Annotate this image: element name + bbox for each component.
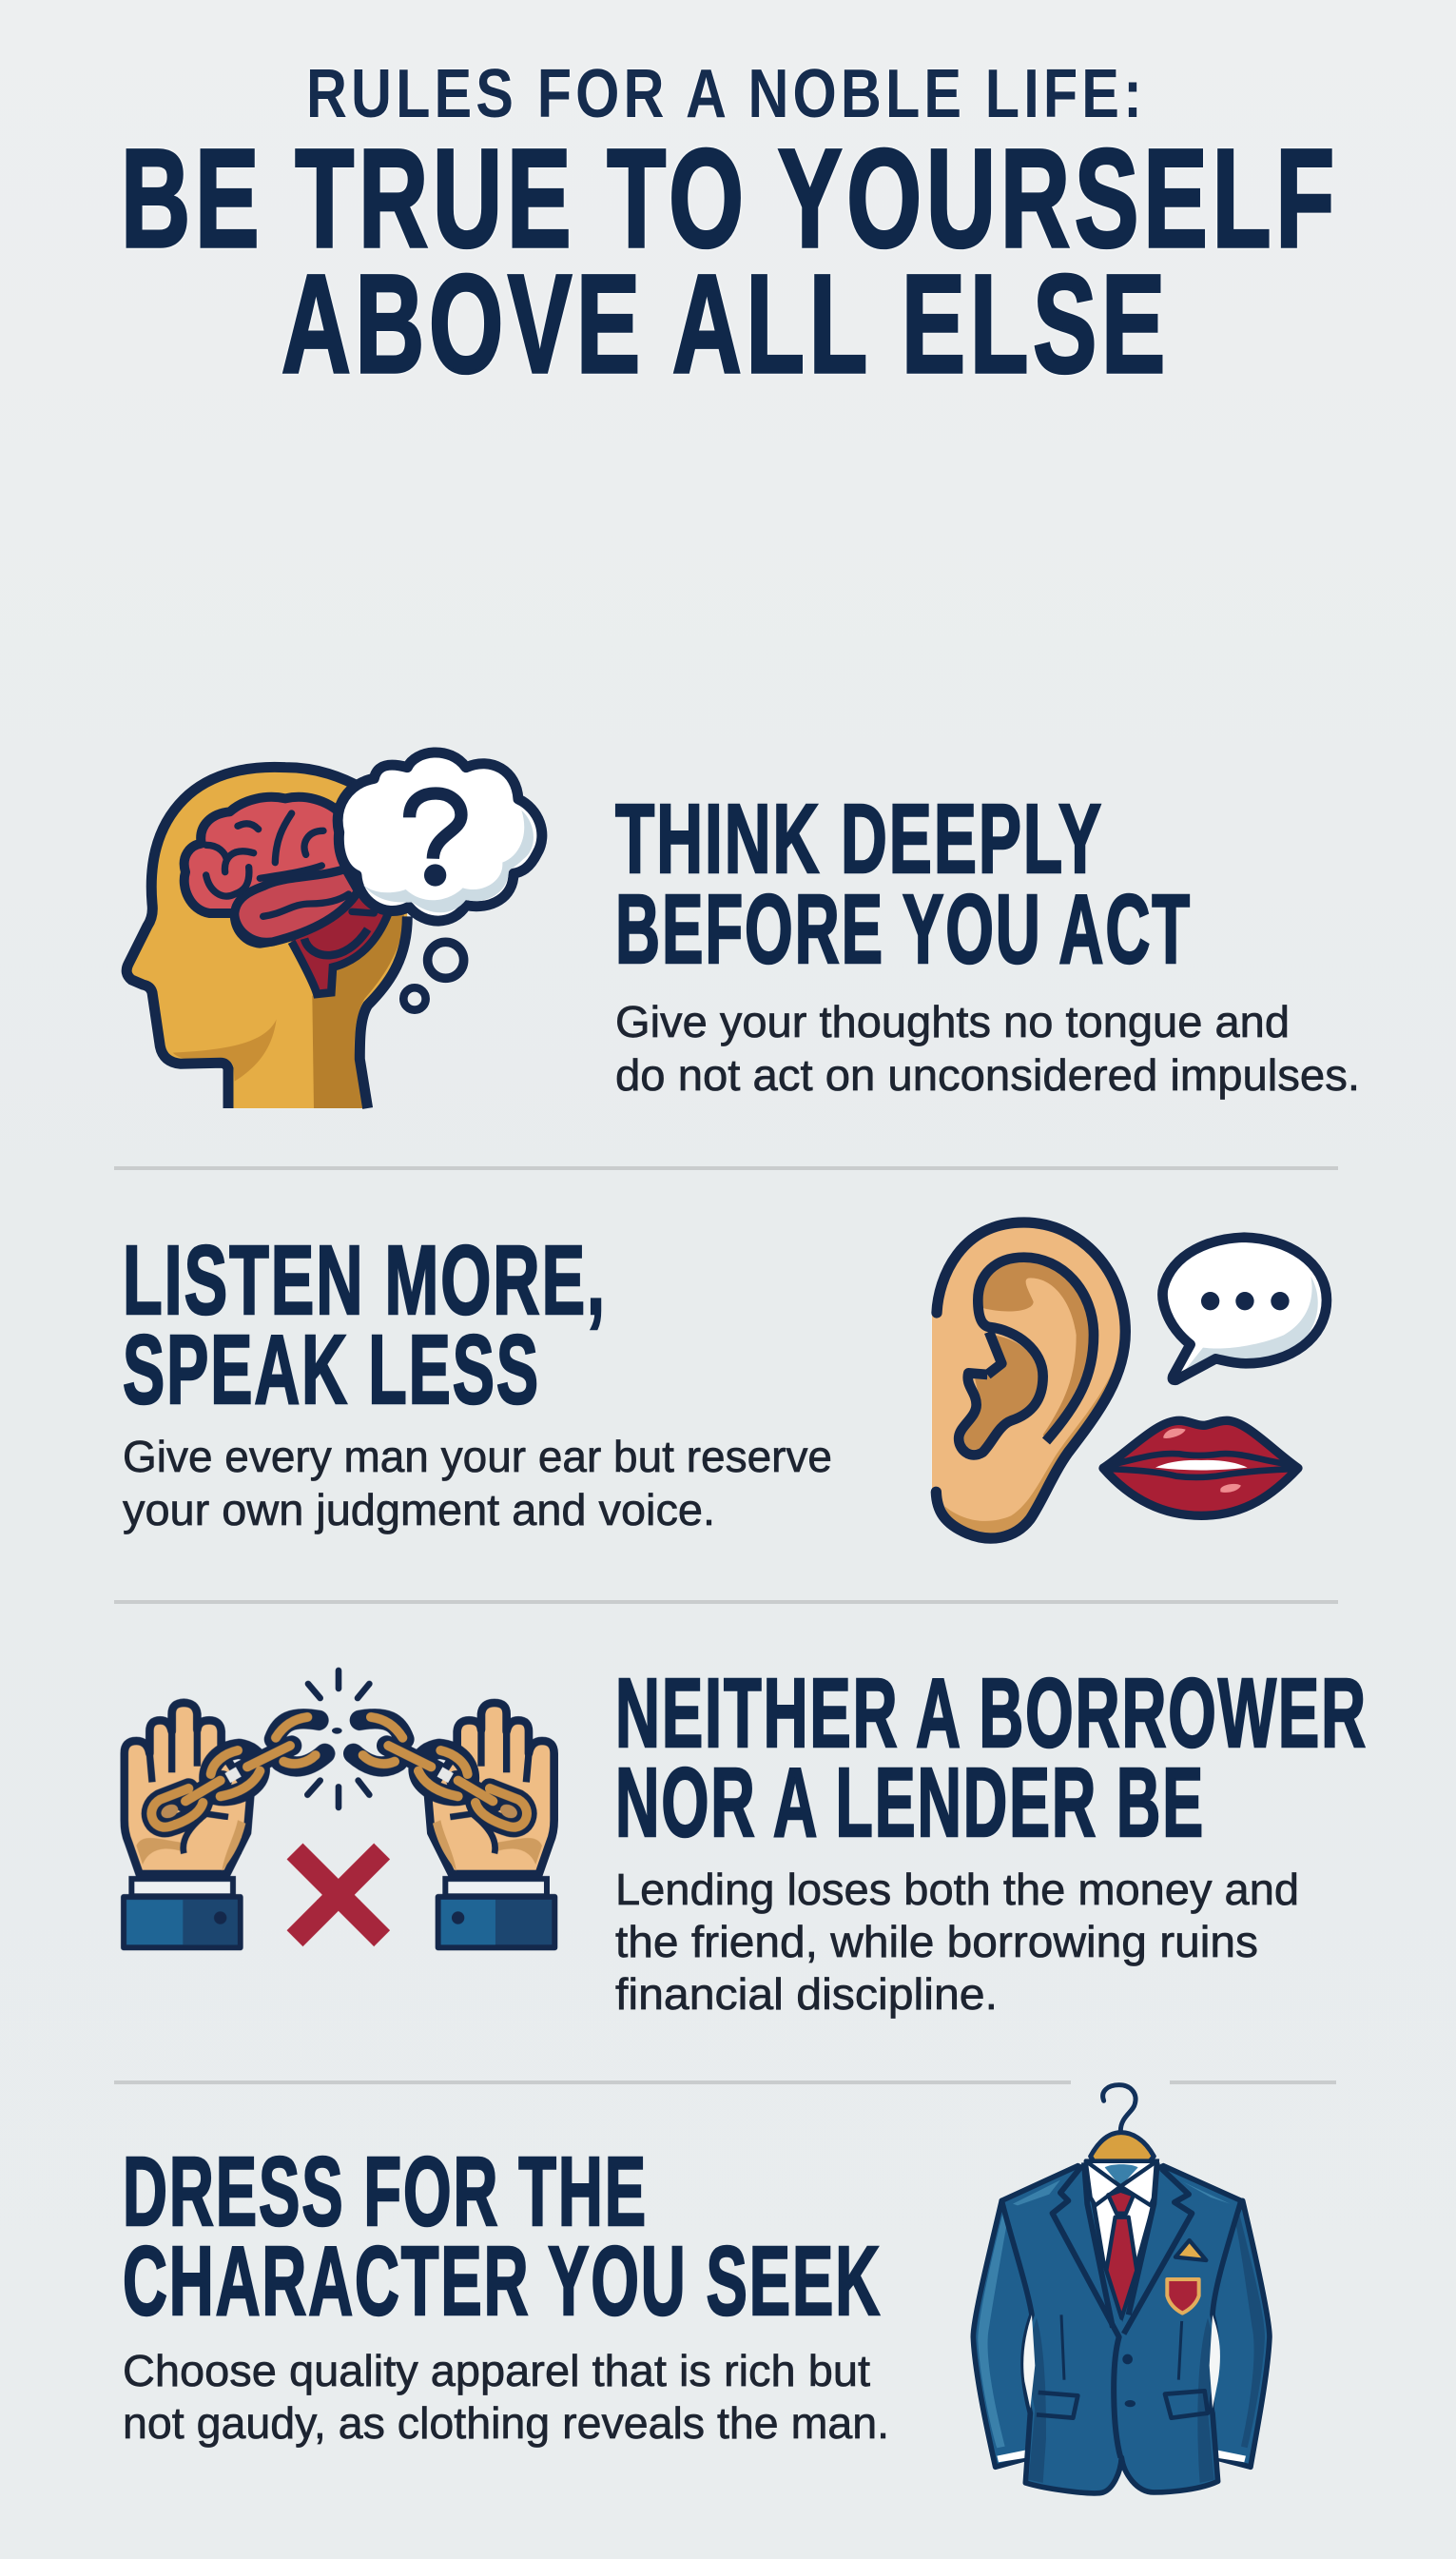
jacket body xyxy=(1001,2166,1241,2493)
heading: LISTEN MORE, xyxy=(123,1225,607,1335)
heading xyxy=(615,784,1192,984)
left hand xyxy=(124,1703,250,1947)
icon: head with brain and thought cloud xyxy=(126,752,542,1108)
panel: dress for the character xyxy=(123,2085,1270,2493)
body text xyxy=(615,1865,1299,2019)
tie xyxy=(1106,2191,1136,2318)
buttons xyxy=(1122,2354,1136,2407)
panel: listen more xyxy=(123,1222,1327,1538)
sparks xyxy=(307,1670,369,1807)
shield badge xyxy=(1167,2279,1199,2314)
shirt and neck xyxy=(1086,2161,1157,2315)
thought cloud with question mark xyxy=(338,752,542,921)
lapels and front xyxy=(1037,2162,1208,2457)
heading xyxy=(123,2137,882,2335)
icon: suit jacket on hanger xyxy=(973,2085,1270,2493)
body text xyxy=(123,2346,889,2448)
brain xyxy=(184,797,388,994)
left chain xyxy=(151,1717,325,1827)
panel: think deeply xyxy=(126,752,1360,1108)
body text xyxy=(123,1432,832,1534)
heading: CHARACTER YOU SEEK xyxy=(123,2226,882,2335)
body text: not gaudy, as clothing reveals the man. xyxy=(123,2398,889,2448)
speech bubble xyxy=(1163,1238,1327,1380)
icon: hands breaking a chain with red X xyxy=(124,1670,554,1947)
red X xyxy=(295,1851,382,1939)
right hand xyxy=(428,1703,554,1947)
right chain xyxy=(354,1717,527,1827)
arm gaps xyxy=(1023,2315,1220,2409)
body text: financial discipline. xyxy=(615,1969,998,2019)
icon: ear, speech bubble and lips xyxy=(932,1222,1327,1538)
body text: Give your thoughts no tongue and xyxy=(615,997,1290,1046)
question mark xyxy=(410,793,461,887)
body text: Choose quality apparel that is rich but xyxy=(123,2346,870,2395)
body text: Give every man your ear but reserve xyxy=(123,1432,832,1481)
cuffs xyxy=(997,2450,1246,2462)
body text xyxy=(615,997,1360,1100)
body text: Lending loses both the money and xyxy=(615,1865,1299,1914)
thought bubbles xyxy=(403,942,464,1010)
heading: THINK DEEPLY xyxy=(615,784,1103,893)
panel: neither a borrower nor a lender xyxy=(124,1658,1368,2019)
body text: your own judgment and voice. xyxy=(123,1485,715,1534)
lips xyxy=(1103,1420,1298,1515)
heading xyxy=(123,1225,607,1424)
sleeves xyxy=(973,2200,1270,2467)
pocket square xyxy=(1175,2240,1206,2260)
body text: the friend, while borrowing ruins xyxy=(615,1917,1258,1966)
heading: DRESS FOR THE xyxy=(123,2137,648,2246)
ear xyxy=(932,1222,1125,1538)
heading xyxy=(615,1658,1368,1857)
title xyxy=(121,56,1339,402)
subtitle: RULES FOR A NOBLE LIFE: xyxy=(306,56,1146,132)
body text: do not act on unconsidered impulses. xyxy=(615,1050,1360,1100)
hanger xyxy=(1091,2085,1154,2172)
heading: SPEAK LESS xyxy=(123,1315,540,1424)
